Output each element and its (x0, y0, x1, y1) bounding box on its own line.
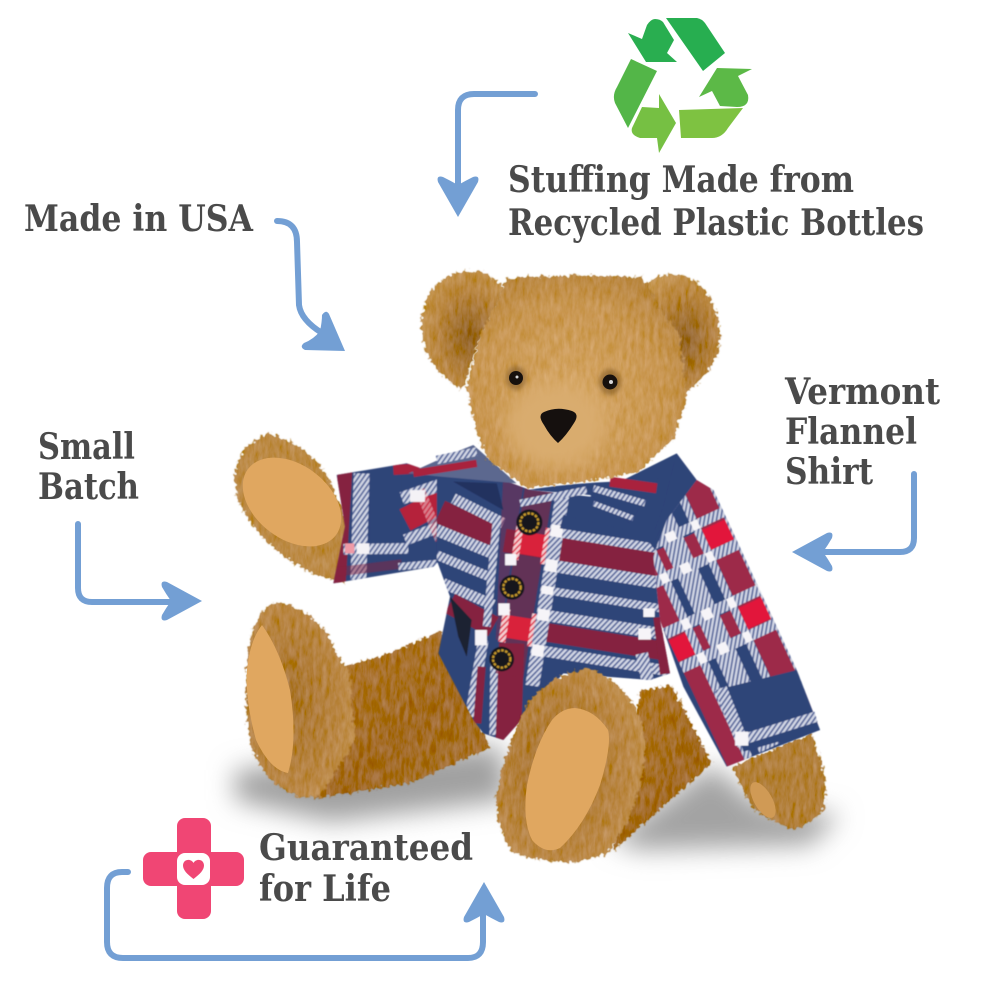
ears (421, 271, 720, 393)
label: guaranteed for life: for Life (259, 868, 391, 910)
ground shadow (235, 745, 840, 850)
arrow: made in USA (277, 221, 345, 351)
flannel shirt (332, 444, 821, 768)
torso left panel stripes (437, 498, 512, 740)
bear head (421, 271, 720, 488)
left sleeve (332, 462, 438, 584)
label: small batch: Batch (38, 466, 139, 508)
foot pad: right foot (525, 708, 609, 850)
bear limbs behind shirt (234, 433, 826, 852)
label: guaranteed for life (259, 827, 473, 910)
heading: recycled stuffing (508, 159, 924, 244)
label: guaranteed for life: Guaranteed (259, 827, 473, 869)
label: small batch (38, 426, 139, 508)
icon: medical cross with heart (143, 818, 244, 919)
label: flannel shirt (784, 371, 940, 493)
head fur (466, 275, 688, 488)
torso plaid (430, 450, 703, 750)
arrow: recycled stuffing (438, 94, 535, 217)
bear right foot (496, 668, 646, 863)
buttons (489, 509, 542, 671)
teddy bear in flannel shirt (226, 271, 849, 863)
shirt collar (408, 445, 658, 523)
shirt tag (450, 597, 472, 657)
torso right panel stripes (495, 482, 670, 688)
hand pad: lower hand (745, 778, 781, 822)
label: flannel shirt: Flannel (785, 411, 917, 453)
heading: recycled stuffing: Stuffing Made from (508, 159, 854, 201)
label: flannel shirt: Vermont (784, 371, 940, 413)
right sleeve plaid (652, 480, 820, 768)
label: small batch: Small (38, 426, 135, 468)
nose (540, 409, 577, 443)
label: flannel shirt: Shirt (785, 451, 873, 493)
right cuff (721, 670, 820, 752)
paw pad: raised arm (226, 439, 358, 565)
label: made in USA: Made in USA (24, 198, 254, 240)
muzzle (506, 383, 606, 467)
heading: recycled stuffing: Recycled Plastic Bottles (508, 202, 924, 244)
icon: recycling symbol (614, 18, 752, 153)
foot pad: left foot (247, 625, 294, 773)
arrow: flannel shirt (792, 474, 914, 571)
arrow: small batch (78, 524, 202, 620)
eyes (506, 366, 621, 395)
arrow: guaranteed for life (107, 872, 504, 958)
